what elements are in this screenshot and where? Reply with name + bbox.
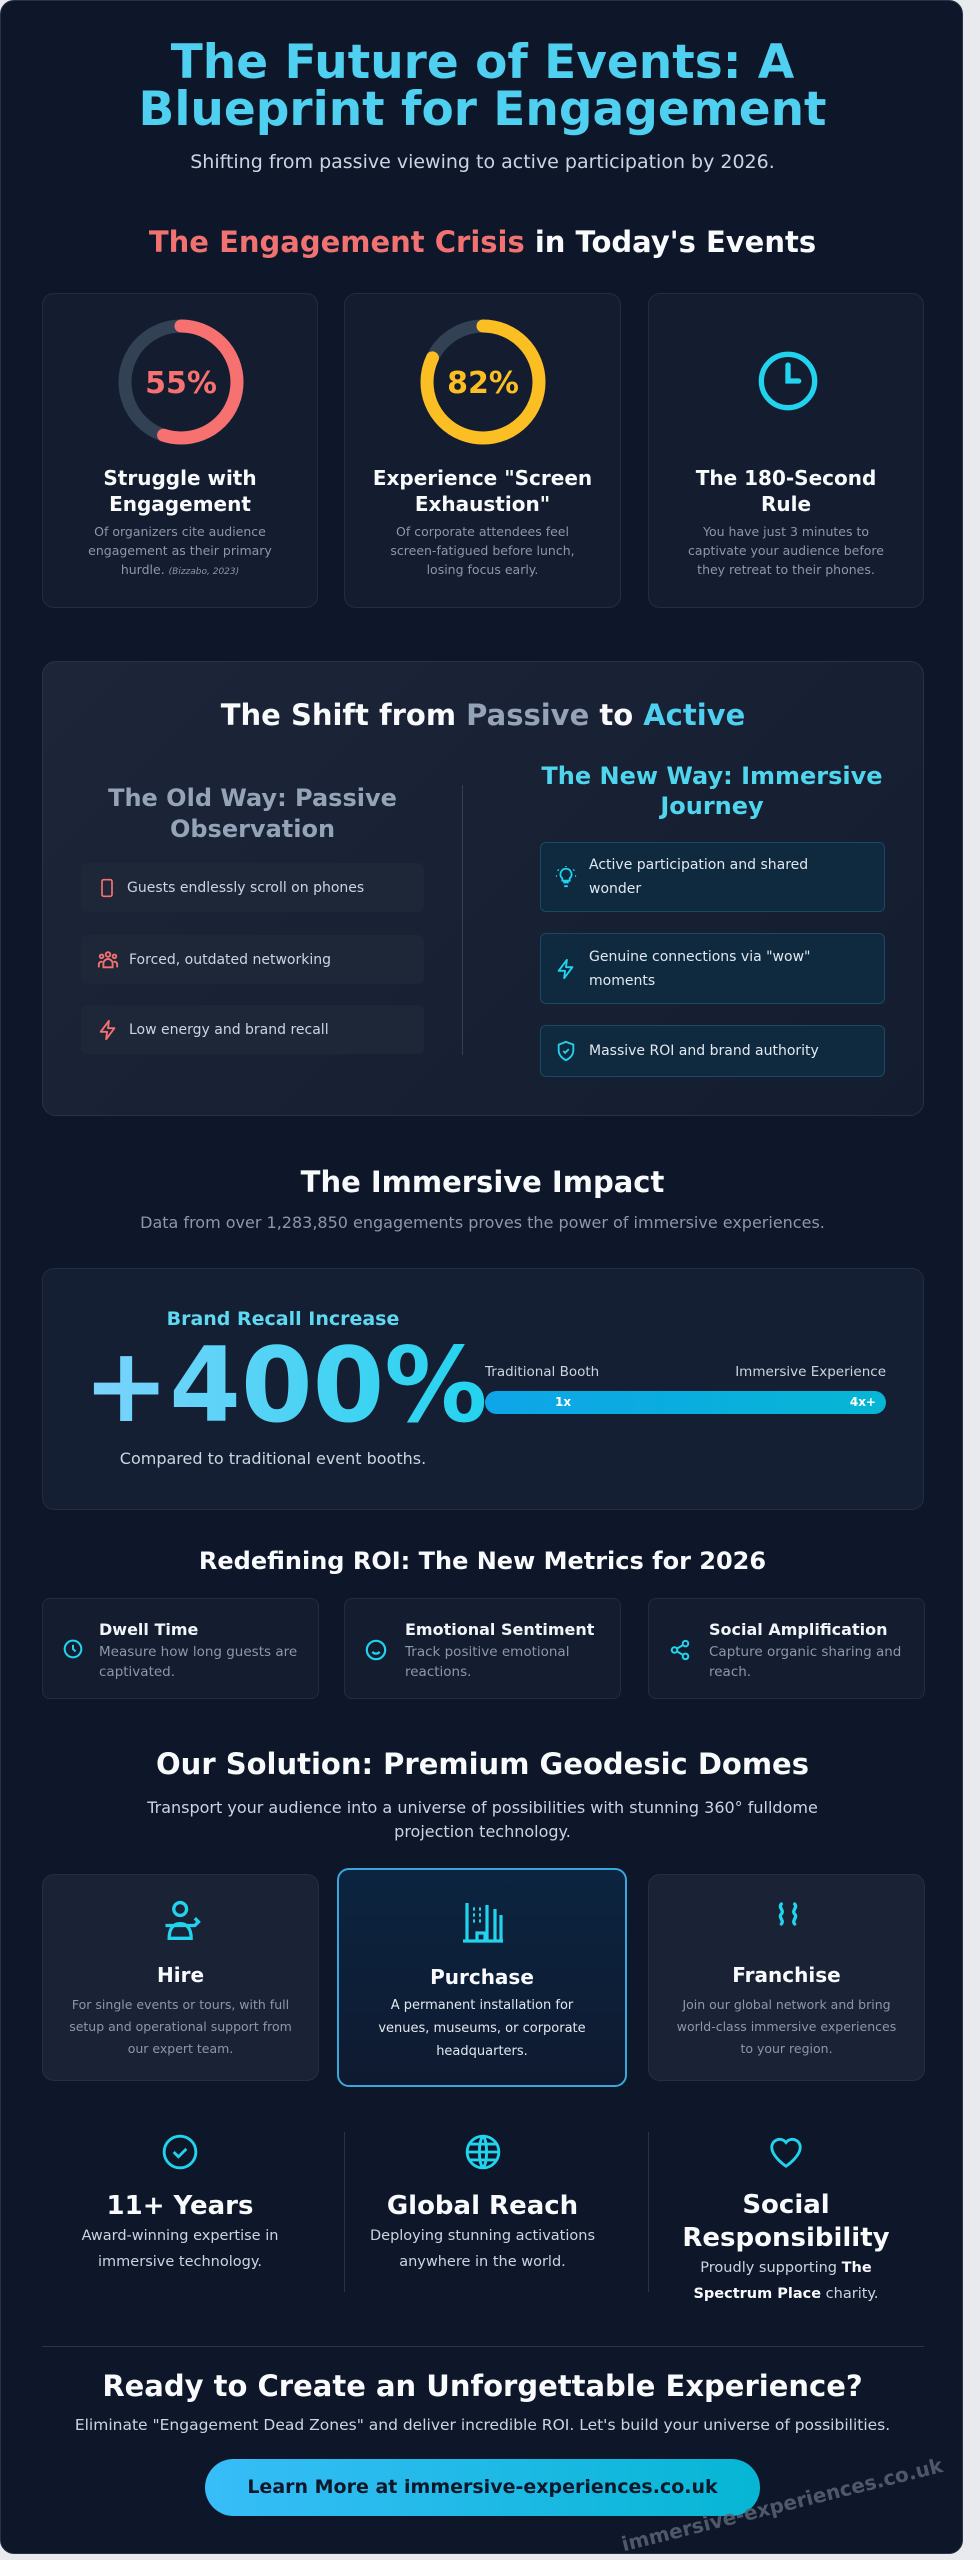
donut chart 82% bbox=[420, 320, 546, 444]
card: hire: For single events or tours, with full setup and operational support from our expert team. bbox=[69, 1997, 292, 2056]
panel: 82% card bbox=[344, 293, 621, 608]
old item: networking bbox=[81, 935, 424, 984]
impact subtitle: Data from over 1,283,850 engagements proves the power of immersive experiences. bbox=[140, 1213, 825, 1232]
stat: social: Proudly supporting The bbox=[700, 2260, 872, 2276]
new way heading bbox=[541, 762, 883, 820]
card text: Of corporate attendees feel screen-fatigued before lunch, losing focus early. bbox=[390, 524, 575, 577]
old way heading: Observation bbox=[170, 815, 335, 843]
metric: emotional sentiment bbox=[344, 1598, 621, 1699]
new item: participation bbox=[540, 842, 885, 912]
icon: links bbox=[778, 1902, 798, 1926]
card title: Struggle with bbox=[103, 466, 257, 490]
card: purchase: Purchase bbox=[430, 1965, 534, 1989]
card text: Of organizers cite audience engagement as their primary hurdle. (Bizzabo, 2023) bbox=[88, 524, 272, 577]
bar comparison bbox=[484, 1364, 886, 1414]
bar comparison: 4x+ bbox=[850, 1395, 876, 1409]
icon: building bbox=[463, 1903, 503, 1943]
stat divider bbox=[344, 2132, 345, 2292]
heading: The Shift from Passive to Active bbox=[221, 698, 745, 732]
bar comparison: 1x bbox=[555, 1395, 571, 1409]
icon: heart bbox=[770, 2138, 802, 2168]
CTA text: Eliminate "Engagement Dead Zones" and deliver incredible ROI. Let's build your universe of possibilities. bbox=[75, 2416, 890, 2434]
card title: The 180-Second bbox=[696, 466, 876, 490]
heading: our solution: Our Solution: Premium Geodesic Domes bbox=[156, 1747, 809, 1781]
donut chart 55%: 55% bbox=[145, 366, 217, 401]
old item: phones: Guests endlessly scroll on phones bbox=[127, 880, 364, 896]
card title: Engagement bbox=[109, 492, 251, 516]
new item: connections: Genuine connections via "wow" moments bbox=[589, 948, 810, 988]
card title: Rule bbox=[761, 492, 811, 516]
label: Brand Recall Increase bbox=[167, 1308, 399, 1330]
metric: social amplification bbox=[648, 1598, 925, 1699]
metric: dwell time bbox=[42, 1598, 319, 1699]
watermark: immersive-experiences.co.uk bbox=[619, 2453, 945, 2554]
card title bbox=[103, 466, 257, 516]
heading: immersive impact: The Immersive Impact bbox=[301, 1165, 664, 1199]
new way heading: The New Way: Immersive bbox=[541, 762, 883, 790]
donut chart 82%: 82% bbox=[447, 366, 519, 401]
card title bbox=[696, 466, 876, 516]
metric: social amplification: Capture organic sharing and reach. bbox=[709, 1644, 901, 1680]
old item: phones bbox=[81, 863, 424, 912]
old item: low energy: Low energy and brand recall bbox=[129, 1022, 329, 1038]
panel: brand recall bbox=[42, 1268, 924, 1510]
icon: clock bbox=[758, 352, 818, 410]
old way heading: The Old Way: Passive bbox=[108, 784, 397, 812]
new way heading: Journey bbox=[660, 792, 764, 820]
card: franchise: Join our global network and bring world-class immersive experiences to your region. bbox=[677, 1997, 896, 2056]
title: The Future of Events: A bbox=[171, 35, 794, 90]
card: purchase bbox=[337, 1868, 627, 2087]
stat: years: immersive technology. bbox=[98, 2254, 262, 2270]
heading: engagement crisis: The Engagement Crisis in Today's Events bbox=[149, 225, 816, 259]
stat: social: Responsibility bbox=[682, 2223, 890, 2253]
new item: participation: Active participation and shared wonder bbox=[589, 857, 808, 897]
stat: global bbox=[370, 2134, 595, 2270]
title: Blueprint for Engagement bbox=[138, 82, 826, 137]
heading: redefining ROI: Redefining ROI: The New Metrics for 2026 bbox=[199, 1547, 766, 1575]
divider bbox=[462, 785, 463, 1055]
stat: social: Social bbox=[742, 2190, 830, 2220]
divider line bbox=[42, 2346, 924, 2347]
card title bbox=[373, 466, 592, 516]
old way heading bbox=[108, 784, 397, 843]
card: franchise bbox=[648, 1874, 925, 2081]
icon: check circle bbox=[162, 2134, 198, 2170]
stat divider bbox=[648, 2132, 649, 2292]
icon: globe bbox=[466, 2134, 500, 2170]
panel: shift passive to active bbox=[42, 661, 924, 1116]
card title: Exhaustion" bbox=[415, 492, 550, 516]
stat: social bbox=[682, 2138, 890, 2302]
bar comparison: Traditional Booth bbox=[485, 1364, 599, 1380]
metric: dwell time: Measure how long guests are captivated. bbox=[99, 1644, 297, 1680]
stat: global: anywhere in the world. bbox=[399, 2254, 566, 2270]
stat: years bbox=[82, 2134, 278, 2270]
card: franchise: Franchise bbox=[732, 1963, 841, 1987]
CTA button: Learn More at immersive-experiences.co.uk bbox=[247, 2476, 718, 2498]
panel: 55% card bbox=[42, 293, 318, 608]
stat: years: 11+ Years bbox=[107, 2191, 253, 2221]
stat: global: Global Reach bbox=[387, 2191, 578, 2221]
card: hire: Hire bbox=[157, 1963, 204, 1987]
card: purchase: A permanent installation for venues, museums, or corporate headquarters. bbox=[378, 1998, 586, 2059]
stat: years: Award-winning expertise in bbox=[82, 2228, 278, 2244]
metric: emotional sentiment: Emotional Sentiment bbox=[405, 1620, 594, 1639]
icon: person bbox=[166, 1900, 201, 1940]
new item: connections bbox=[540, 933, 885, 1004]
stat: global: Deploying stunning activations bbox=[370, 2228, 595, 2244]
metric: emotional sentiment: Track positive emotional reactions. bbox=[405, 1644, 569, 1680]
metric: dwell time: Dwell Time bbox=[99, 1620, 198, 1639]
card title: Experience "Screen bbox=[373, 466, 592, 490]
title bbox=[138, 35, 826, 137]
metric: social amplification: Social Amplification bbox=[709, 1620, 887, 1639]
CTA button bbox=[205, 2459, 760, 2516]
old item: networking: Forced, outdated networking bbox=[129, 952, 331, 968]
card text: You have just 3 minutes to captivate your audience before they retreat to their phones. bbox=[688, 524, 884, 577]
bar comparison: Immersive Experience bbox=[735, 1364, 886, 1380]
new item: ROI: Massive ROI and brand authority bbox=[589, 1043, 819, 1059]
solution subtitle: Transport your audience into a universe of possibilities with stunning 360° fulldome projection technology. bbox=[147, 1798, 818, 1841]
donut chart 55% bbox=[118, 320, 244, 444]
card: hire bbox=[42, 1874, 319, 2081]
old item: low energy bbox=[81, 1005, 424, 1054]
subtitle: Shifting from passive viewing to active participation by 2026. bbox=[190, 151, 775, 173]
big number: +400% bbox=[83, 1326, 488, 1446]
caption: Compared to traditional event booths. bbox=[120, 1449, 426, 1468]
new item: ROI bbox=[540, 1025, 885, 1077]
panel: 180-second card bbox=[648, 293, 924, 608]
stat: social: Spectrum Place charity. bbox=[693, 2286, 879, 2302]
heading: CTA: Ready to Create an Unforgettable Experience? bbox=[102, 2369, 863, 2403]
